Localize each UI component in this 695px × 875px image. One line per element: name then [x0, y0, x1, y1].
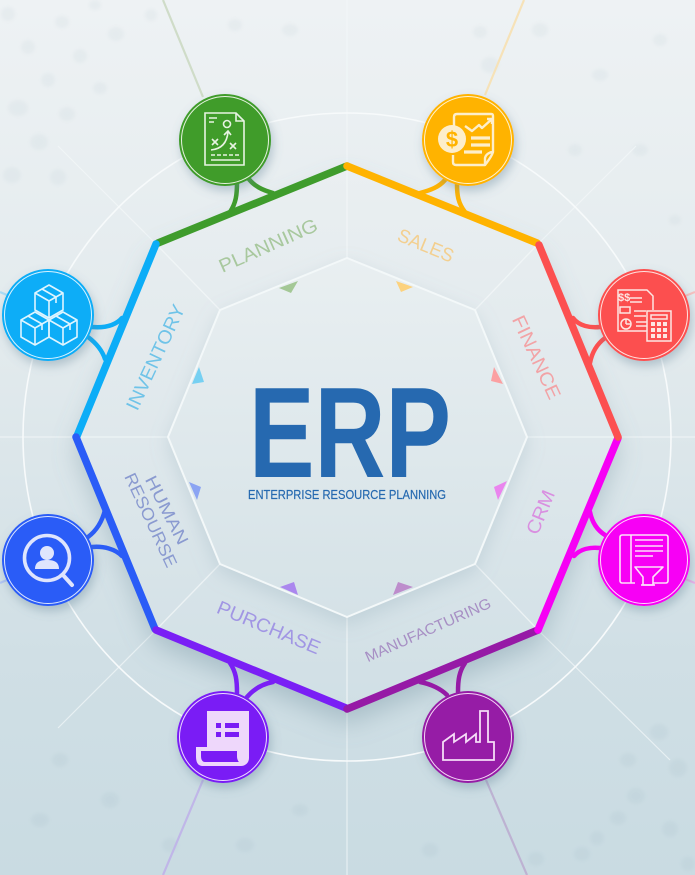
octagon edge: sales — [347, 166, 537, 243]
icon: factory — [422, 691, 514, 783]
icon: planning document — [179, 94, 271, 186]
plate divider spokes — [76, 166, 618, 709]
octagon edge: purchase — [156, 630, 346, 708]
label: sales: SALES — [394, 225, 457, 267]
label: purchase: PURCHASE — [214, 598, 323, 659]
title: ERP: ERP — [249, 361, 451, 505]
icon: purchase receipt — [177, 691, 269, 783]
icon: finance documents and calculator — [598, 269, 690, 361]
outer ring — [23, 113, 671, 761]
inner octagon triangle markers — [189, 281, 507, 595]
icon: human resource search — [2, 514, 94, 606]
octagon edge: inventory — [77, 244, 156, 436]
icon: inventory boxes — [2, 269, 94, 361]
inner octagon — [168, 258, 527, 617]
icon: sales document: $ — [446, 127, 458, 152]
background blobs — [1, 0, 681, 225]
label: human resourse: RESOURSE — [120, 470, 181, 570]
octagon edge: human resource — [76, 437, 155, 629]
label: crm: CRM — [523, 487, 560, 538]
subtitle: ENTERPRISE RESOURCE PLANNING — [248, 487, 446, 502]
octagon edge: finance — [539, 245, 618, 437]
label: planning: PLANNING — [216, 215, 321, 278]
label: manufacturing: MANUFACTURING — [363, 595, 494, 666]
lower background blobs — [31, 724, 695, 871]
octagon edge: planning — [158, 166, 347, 243]
label: finance: FINANCE — [507, 312, 564, 403]
octagon edge: crm — [538, 438, 618, 630]
icon: sales document — [422, 94, 514, 186]
icon: crm document with funnel — [598, 514, 690, 606]
label: inventory: INVENTORY — [123, 301, 190, 414]
octagon edge: manufacturing — [347, 630, 538, 709]
label: human resourse: HUMAN — [141, 473, 192, 548]
outer octagon plate — [76, 166, 618, 709]
icon: finance documents and calculator: $$ — [618, 292, 630, 304]
